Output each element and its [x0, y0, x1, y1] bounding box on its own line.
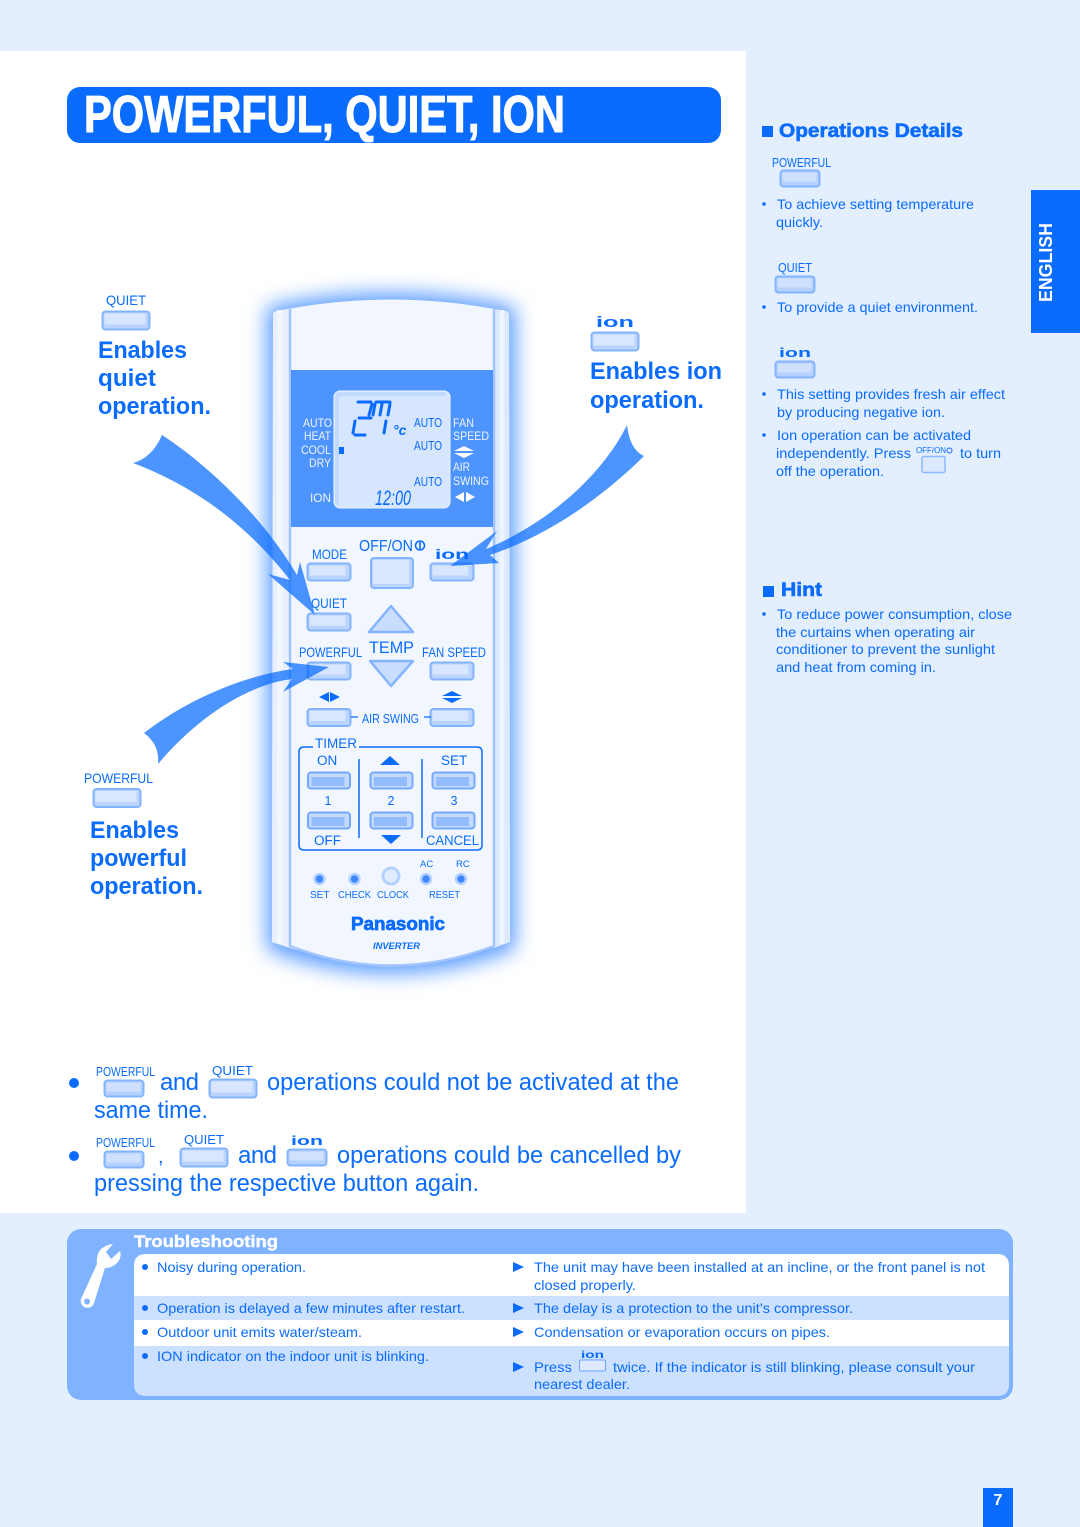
detail: ion: OFF/ON: [916, 446, 946, 455]
note: cancel: QUIET: [184, 1132, 224, 1147]
callout: quiet: quiet: [98, 365, 156, 392]
callout: ion: ion: [596, 314, 634, 331]
LCD screen: [334, 391, 450, 510]
remote buttons: ion: [435, 546, 469, 562]
callout: quiet: Enables: [98, 337, 187, 364]
callout: quiet: QUIET: [106, 292, 146, 308]
detail: powerful: [762, 156, 974, 230]
remote buttons: AIR SWING: [362, 712, 419, 726]
detail: ion: to turn: [960, 445, 1001, 461]
note: cancel: [69, 1132, 681, 1197]
row: delay: [142, 1300, 853, 1316]
hint text: [762, 606, 1012, 675]
row: ion indicator: ion: [581, 1350, 604, 1361]
row: noisy: [142, 1259, 985, 1293]
callout: powerful: powerful: [90, 845, 187, 872]
LCD screen: °c: [393, 422, 407, 438]
display band: COOL: [301, 443, 331, 457]
temperature digits: [353, 402, 390, 435]
timer box: 2: [388, 794, 395, 808]
page number: [983, 1488, 1013, 1527]
row: noisy: The unit may have been installed at an incline, or the front panel is not: [534, 1259, 985, 1275]
remote glow: [273, 299, 509, 968]
title: POWERFUL, QUIET, ION: [84, 86, 565, 144]
row: water: Condensation or evaporation occurs on pipes.: [534, 1324, 830, 1340]
timer box: CANCEL: [426, 833, 479, 848]
detail: ion: [762, 345, 1005, 479]
detail: ion: ion: [779, 345, 811, 360]
note: cancel: pressing the respective button again.: [94, 1170, 479, 1197]
reset and clock controls: [310, 859, 470, 901]
reset and clock controls: SET: [310, 890, 329, 901]
note: cannot combine: same time.: [94, 1097, 208, 1124]
detail: quiet: QUIET: [778, 261, 812, 275]
timer box: OFF: [314, 833, 341, 848]
row: ion indicator: ION indicator on the indoor unit is blinking.: [157, 1348, 429, 1364]
note: cannot combine: QUIET: [212, 1063, 253, 1078]
timer box: [299, 736, 482, 850]
arrow to powerful: [144, 662, 329, 764]
detail: ion: independently. Press: [776, 445, 911, 461]
table rows: [134, 1254, 1009, 1396]
main white panel: [0, 51, 746, 1213]
timer box: 3: [451, 794, 458, 808]
hint text: To reduce power consumption, close: [777, 606, 1012, 622]
note: cancel: ,: [158, 1146, 164, 1168]
panasonic logo: Panasonic: [351, 914, 445, 934]
callout: quiet: operation.: [98, 393, 211, 420]
LCD screen: AUTO: [414, 416, 442, 430]
detail: powerful: quickly.: [776, 214, 823, 230]
display band: [291, 370, 493, 527]
LCD screen: AUTO: [414, 475, 442, 489]
hint text: the curtains when operating air: [776, 624, 975, 640]
display band: DRY: [309, 456, 331, 470]
remote body: [272, 300, 510, 964]
display band: FAN: [453, 416, 474, 430]
LCD screen: AUTO: [414, 439, 442, 453]
remote control: [272, 299, 510, 968]
row: ion indicator: twice. If the indicator is still blinking, please consult your: [613, 1359, 975, 1375]
note: cancel: ion: [291, 1133, 323, 1148]
display band: AIR: [453, 460, 470, 474]
heading: operations details: Operations Details: [779, 121, 963, 142]
english tab: ENGLISH: [1036, 223, 1056, 302]
timer box: ON: [317, 753, 337, 768]
callout: ion: [590, 314, 722, 414]
arrow to quiet: [133, 435, 315, 615]
callout: powerful: POWERFUL: [84, 770, 153, 786]
row: ion indicator: Press: [534, 1359, 572, 1375]
remote buttons: MODE: [312, 546, 347, 562]
inverter label: INVERTER: [373, 941, 420, 952]
display band: ION: [310, 491, 331, 505]
note: cancel: and: [238, 1142, 277, 1169]
hint text: conditioner to prevent the sunlight: [776, 641, 995, 657]
callout: quiet: [98, 292, 211, 420]
callout: ion: operation.: [590, 387, 704, 414]
detail: ion: Ion operation can be activated: [777, 427, 971, 443]
heading: troubleshooting: Troubleshooting: [134, 1232, 278, 1251]
english tab: [1031, 190, 1080, 333]
note: cannot combine: [69, 1063, 679, 1124]
callout: powerful: [84, 770, 203, 900]
row: noisy: closed properly.: [534, 1277, 636, 1293]
page number: 7: [994, 1492, 1003, 1509]
detail: quiet: To provide a quiet environment.: [777, 299, 978, 315]
heading: hint: Hint: [781, 580, 823, 601]
display band: SPEED: [453, 429, 489, 443]
row: water: [142, 1324, 830, 1340]
detail: ion: by producing negative ion.: [777, 404, 945, 420]
reset and clock controls: CHECK: [338, 890, 371, 901]
reset and clock controls: AC: [420, 859, 433, 870]
callout: ion: Enables ion: [590, 358, 722, 385]
hint text: and heat from coming in.: [776, 659, 936, 675]
row: ion indicator: nearest dealer.: [534, 1376, 630, 1392]
reset and clock controls: RC: [456, 859, 470, 870]
reset and clock controls: CLOCK: [377, 890, 409, 901]
row: delay: The delay is a protection to the unit’s compressor.: [534, 1300, 853, 1316]
timer box: 1: [325, 794, 332, 808]
timer box: TIMER: [315, 736, 357, 751]
LCD screen: 12:00: [375, 487, 411, 510]
callout: powerful: operation.: [90, 873, 203, 900]
note: cancel: operations could be cancelled by: [337, 1142, 681, 1169]
display band: SWING: [453, 474, 489, 488]
heading: hint: [763, 580, 823, 601]
detail: powerful: POWERFUL: [772, 156, 831, 170]
remote buttons: OFF/ON: [359, 538, 413, 555]
reset and clock controls: RESET: [429, 890, 460, 901]
note: cannot combine: and: [160, 1069, 199, 1096]
remote buttons: POWERFUL: [299, 644, 362, 660]
panel: troubleshooting: [67, 1229, 1013, 1400]
remote buttons: QUIET: [311, 595, 347, 611]
timer box: SET: [441, 753, 467, 768]
detail: ion: off the operation.: [776, 463, 884, 479]
panel: hint: [762, 580, 1012, 675]
detail: powerful: To achieve setting temperature: [777, 196, 974, 212]
arrow to ion: [450, 425, 644, 566]
row: delay: Operation is delayed a few minutes after restart.: [157, 1300, 465, 1316]
display band: AUTO: [303, 416, 332, 430]
detail: ion: This setting provides fresh air effect: [777, 386, 1005, 402]
remote buttons: TEMP: [369, 638, 414, 657]
note: cancel: POWERFUL: [96, 1135, 155, 1150]
callout: powerful: Enables: [90, 817, 179, 844]
row: water: Outdoor unit emits water/steam.: [157, 1324, 362, 1340]
display band: HEAT: [304, 429, 332, 443]
row: noisy: Noisy during operation.: [157, 1259, 306, 1275]
row: ion indicator: [142, 1348, 975, 1392]
detail: quiet: [762, 261, 978, 315]
panel: operations details: [762, 121, 1005, 479]
remote buttons: [299, 538, 486, 726]
remote buttons: FAN SPEED: [422, 644, 486, 660]
icon: wrench: [81, 1244, 121, 1308]
note: cannot combine: POWERFUL: [96, 1064, 155, 1079]
note: cannot combine: operations could not be activated at the: [267, 1069, 679, 1096]
